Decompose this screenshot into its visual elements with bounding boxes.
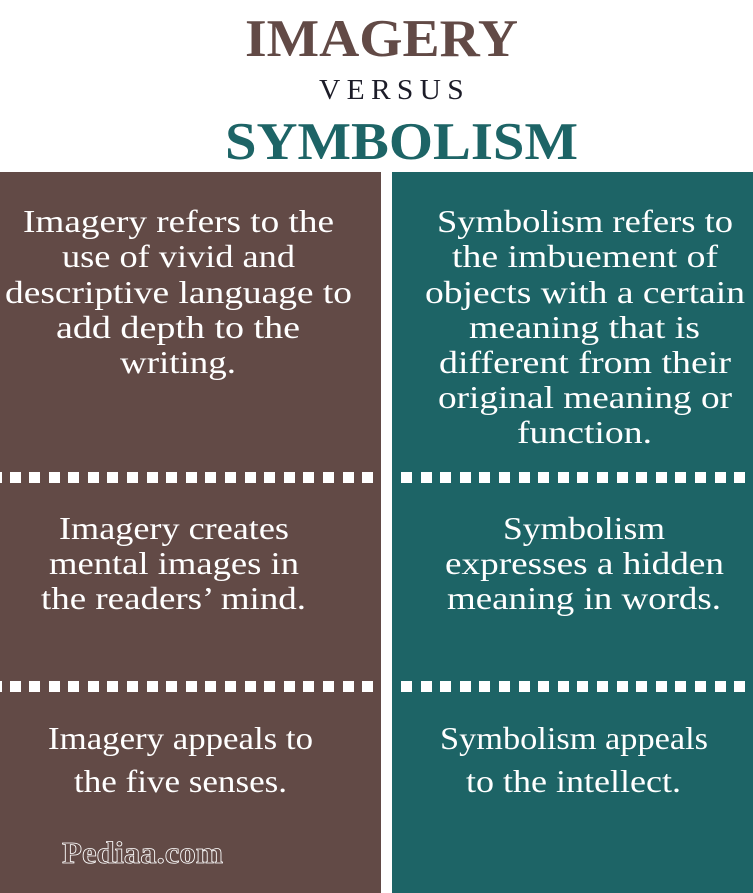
text block: imagery appeal: Imagery appeals to xyxy=(48,720,313,756)
panel: symbolism column xyxy=(392,172,753,893)
text block: symbolism definition: meaning that is xyxy=(469,309,700,345)
text block: symbolism effect: meaning in words. xyxy=(447,580,721,616)
text block: symbolism effect: expresses a hidden xyxy=(445,545,724,581)
text block: symbolism appeal: to the intellect. xyxy=(466,763,681,799)
heading: symbolism: SYMBOLISM xyxy=(225,113,578,171)
logo: Pediaa.com: Pediaa.com xyxy=(62,835,223,870)
text block: symbolism appeal: Symbolism appeals xyxy=(440,720,708,756)
heading: versus: VERSUS xyxy=(319,75,470,106)
text block: imagery effect: mental images in xyxy=(49,545,299,581)
text block: symbolism effect xyxy=(445,510,724,616)
text block: imagery definition xyxy=(5,203,352,380)
text block: imagery definition: descriptive language to xyxy=(5,274,352,310)
text block: symbolism definition: Symbolism refers to xyxy=(437,203,733,239)
text block: imagery definition: Imagery refers to the xyxy=(23,203,334,239)
text block: symbolism definition xyxy=(425,203,745,450)
title xyxy=(225,10,578,171)
text block: imagery appeal xyxy=(48,720,313,799)
text block: symbolism definition: the imbuement of xyxy=(452,238,718,274)
text block: symbolism definition: original meaning or xyxy=(438,379,732,415)
text block: imagery effect: the readers’ mind. xyxy=(41,580,306,616)
text block: imagery effect: Imagery creates xyxy=(59,510,289,546)
text block: symbolism appeal xyxy=(440,720,708,799)
heading: imagery: IMAGERY xyxy=(245,10,518,68)
text block: imagery definition: use of vivid and xyxy=(62,238,295,274)
text block: symbolism definition: objects with a certain xyxy=(425,274,745,310)
text block: imagery definition: add depth to the xyxy=(56,309,300,345)
text block: imagery definition: writing. xyxy=(120,344,236,380)
text block: symbolism definition: function. xyxy=(517,414,652,450)
panel: imagery column xyxy=(0,172,381,893)
text block: symbolism definition: different from their xyxy=(439,344,731,380)
text block: imagery appeal: the five senses. xyxy=(74,763,287,799)
text block: imagery effect xyxy=(41,510,306,616)
text block: symbolism effect: Symbolism xyxy=(503,510,665,546)
